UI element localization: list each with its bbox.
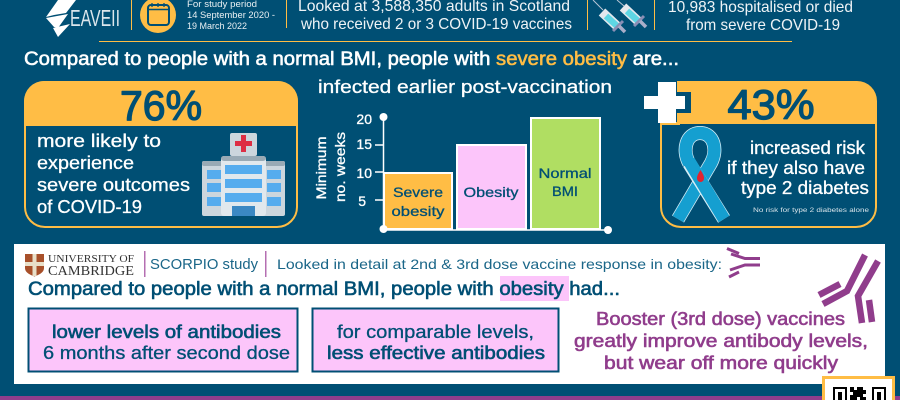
cohort size text bbox=[298, 0, 572, 33]
box: less effective antibodies bbox=[312, 308, 558, 372]
text: increased risk bbox=[727, 138, 869, 198]
icon: EAVE II logo: EAVEII bbox=[70, 5, 120, 31]
text: increased risk: type 2 diabetes bbox=[741, 178, 869, 198]
box: less effective antibodies: less effective antibodies bbox=[327, 343, 545, 363]
text: increased risk: increased risk bbox=[750, 138, 866, 158]
outcomes text: from severe COVID-19 bbox=[686, 17, 840, 34]
text: booster message bbox=[574, 309, 868, 373]
panel: 43% diabetes risk bbox=[644, 81, 877, 227]
axis tick labels: 20 bbox=[356, 111, 372, 127]
chart: minimum weeks to infection bbox=[313, 77, 612, 234]
stat: 43%: 43% bbox=[728, 81, 814, 128]
text: booster message: greatly improve antibody levels, bbox=[574, 331, 868, 351]
text: more likely: experience bbox=[37, 153, 134, 173]
logo: University of Cambridge: CAMBRIDGE bbox=[48, 264, 134, 279]
icon: small antibody bbox=[727, 248, 760, 277]
study period text bbox=[187, 0, 275, 31]
axis title bbox=[313, 132, 348, 202]
bar: severe obesity: Severe bbox=[393, 184, 443, 200]
chart axes bbox=[375, 113, 612, 234]
text: more likely: of COVID-19 bbox=[37, 197, 142, 217]
text: more likely: more likely to bbox=[37, 131, 161, 151]
study period text: 19 March 2022 bbox=[187, 21, 247, 31]
chart title: infected earlier post-vaccination bbox=[318, 77, 612, 97]
icon: calendar bbox=[140, 0, 176, 33]
box: lower antibodies: lower levels of antibodies bbox=[52, 322, 281, 342]
axis tick labels: 15 bbox=[356, 136, 372, 152]
axis tick labels: 10 bbox=[356, 165, 372, 181]
icon: hospital bbox=[202, 133, 285, 216]
study description: Looked in detail at 2nd & 3rd dose vaccine response in obesity: bbox=[277, 256, 722, 272]
bar: normal BMI bbox=[531, 118, 600, 229]
footnote: No risk for type 2 diabetes alone bbox=[753, 208, 870, 214]
box: less effective antibodies: for comparable levels, bbox=[337, 322, 534, 342]
text: booster message: but wear off more quickly bbox=[604, 353, 838, 373]
logo: University of Cambridge bbox=[25, 253, 134, 279]
sub-heading: Compared to people with a normal BMI, people with obesity had... bbox=[28, 279, 620, 300]
icon: diabetes ribbon bbox=[678, 133, 724, 219]
icon: medical cross bbox=[644, 82, 691, 123]
icon: two syringes bbox=[593, 0, 646, 32]
logo: University of Cambridge: UNIVERSITY OF bbox=[48, 253, 134, 265]
box: lower antibodies: 6 months after second dose bbox=[43, 343, 290, 363]
axis title: Minimum bbox=[313, 137, 329, 199]
header strip bbox=[46, 0, 853, 37]
panel: SCORPIO study bbox=[14, 244, 885, 384]
icon: large antibody bbox=[819, 255, 878, 323]
text: increased risk: if they also have bbox=[727, 158, 865, 178]
bar: severe obesity bbox=[384, 173, 452, 229]
box: lower antibodies bbox=[28, 308, 298, 372]
stat: 76%: 76% bbox=[120, 82, 202, 129]
bar: obesity bbox=[457, 145, 526, 229]
axis tick labels bbox=[356, 111, 372, 209]
bar: obesity: Obesity bbox=[464, 184, 518, 200]
bar: normal BMI: BMI bbox=[552, 183, 578, 199]
cohort size text: who received 2 or 3 COVID-19 vaccines bbox=[300, 16, 572, 33]
bar: severe obesity: obesity bbox=[392, 203, 444, 219]
highlight: obesity bbox=[500, 276, 569, 301]
bar: normal BMI: Normal bbox=[538, 165, 592, 181]
text: more likely: severe outcomes bbox=[37, 175, 190, 195]
study name: SCORPIO study bbox=[150, 256, 258, 273]
text: more likely bbox=[37, 131, 190, 217]
axis tick labels: 5 bbox=[358, 193, 366, 209]
study period text: 14 September 2020 - bbox=[187, 10, 275, 20]
axis title: no. weeks bbox=[332, 132, 348, 202]
text: booster message: Booster (3rd dose) vaccines bbox=[596, 309, 845, 329]
panel: 76% severe outcomes bbox=[24, 81, 298, 227]
icon: EAVE II logo bbox=[46, 0, 120, 37]
QR code bbox=[824, 378, 894, 400]
outcomes text bbox=[668, 0, 853, 34]
heading: severe obesity comparison: Compared to people with a normal BMI, people with severe obesity are... bbox=[24, 49, 679, 70]
